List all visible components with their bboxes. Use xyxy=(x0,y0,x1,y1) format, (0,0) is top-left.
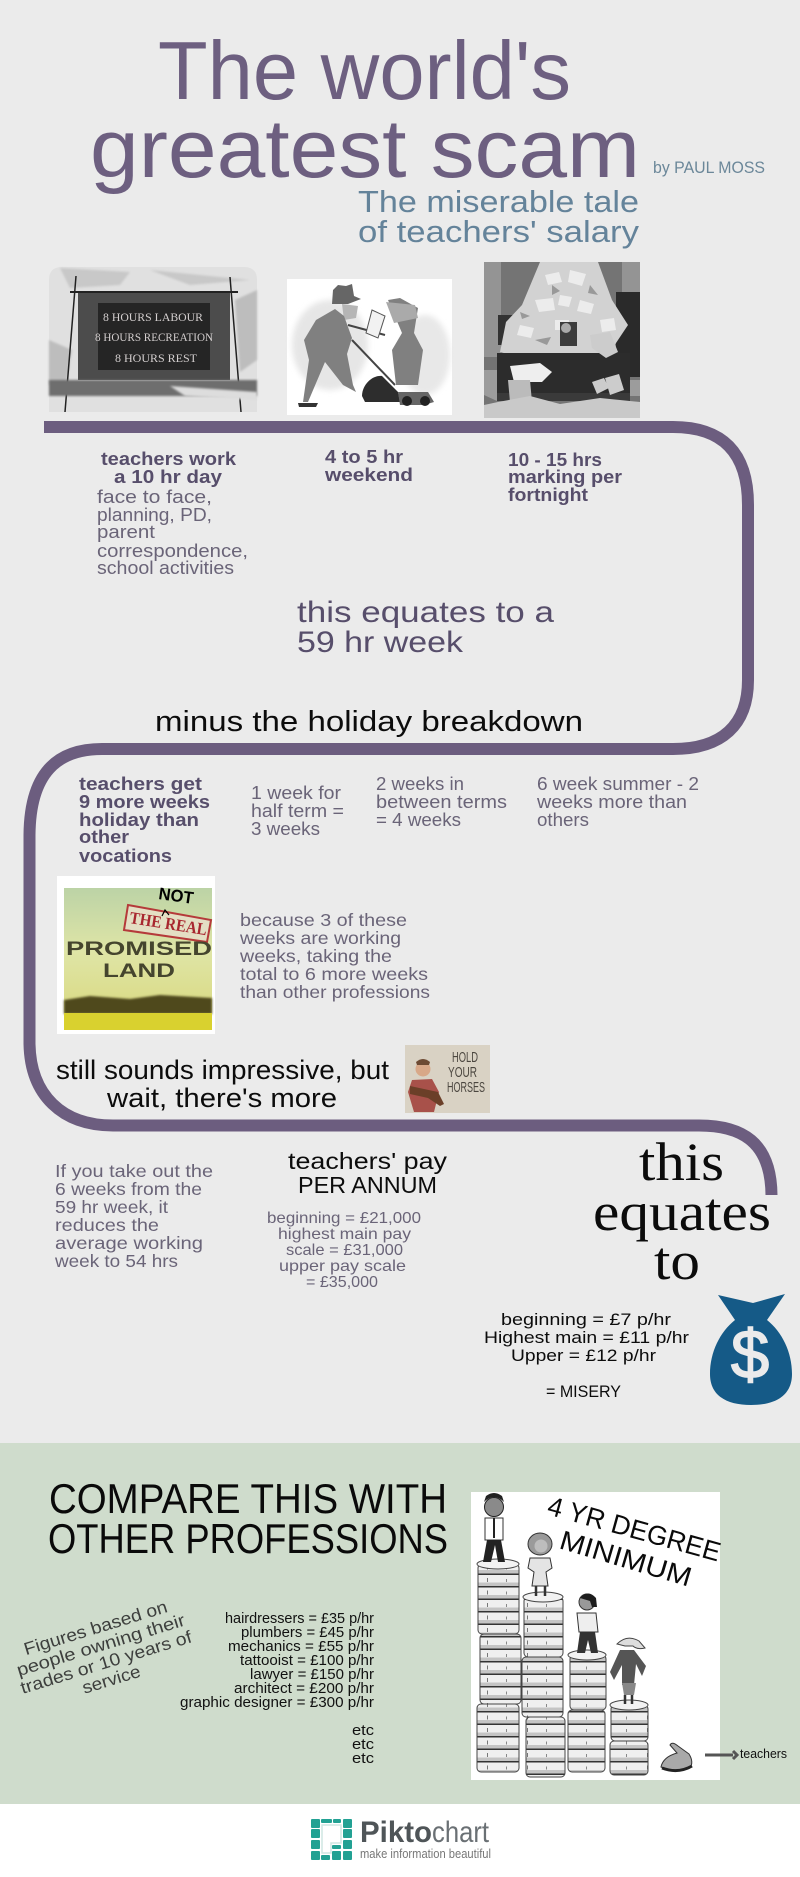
text: hourly pay: = MISERY xyxy=(546,1382,621,1401)
icon: money bag xyxy=(710,1294,792,1405)
text: summer: others xyxy=(537,810,589,830)
image: not the real promised land: PROMISED xyxy=(66,939,212,960)
list: hourly rates: mechanics = £55 p/hr xyxy=(228,1638,374,1655)
text: marking hours: 10 - 15 hrs xyxy=(508,450,602,470)
text: because 3 of these weeks xyxy=(239,910,430,1002)
text: weekend hours xyxy=(324,447,413,485)
text: hourly pay: beginning = £7 p/hr xyxy=(501,1310,671,1329)
text: weekend hours: weekend xyxy=(324,465,413,485)
text: daily duties: parent xyxy=(97,521,155,542)
text: annual pay scales: beginning = £21,000 xyxy=(267,1210,421,1227)
text: half term: 3 weeks xyxy=(251,819,320,839)
text: take out the 6 weeks: reduces the xyxy=(55,1215,159,1235)
arrow: to teachers xyxy=(705,1751,737,1759)
subtitle: of teachers' salary xyxy=(358,214,640,249)
list: hourly rates: tattooist = £100 p/hr xyxy=(240,1652,374,1669)
text: take out the 6 weeks: 6 weeks from the xyxy=(55,1179,202,1199)
text: summer xyxy=(536,774,699,830)
text: 9 more weeks holiday: 9 more weeks xyxy=(79,792,210,812)
text: annual pay scales: highest main pay xyxy=(278,1226,411,1243)
byline: by PAUL MOSS xyxy=(653,158,765,177)
heading: compare this with other professions: COMPARE THIS WITH xyxy=(49,1475,447,1522)
image: eight hours banner engraving: 8 HOURS RECREATION xyxy=(95,330,213,344)
subtitle: The miserable tale xyxy=(358,184,639,219)
image: desk buried in paper xyxy=(484,262,640,418)
text: summer: 6 week summer - 2 xyxy=(537,774,699,794)
text: take out the 6 weeks xyxy=(54,1161,213,1271)
title xyxy=(90,24,640,195)
text: half term: half term = xyxy=(251,801,344,821)
text: 9 more weeks holiday xyxy=(79,774,210,866)
text: between terms: = 4 weeks xyxy=(376,810,461,830)
heading: still sounds impressive: wait, there's more xyxy=(106,1083,337,1113)
logo: piktochart: Pikto xyxy=(360,1816,432,1849)
image: not the real promised land: NOT xyxy=(157,884,195,908)
text: half term: 1 week for xyxy=(251,783,341,803)
subtitle xyxy=(358,184,640,249)
heading: teachers' pay per annum xyxy=(288,1148,448,1198)
note: figures based on: service xyxy=(80,1661,143,1698)
text: 59 hr week: 59 hr week xyxy=(297,626,464,659)
text: marking hours: fortnight xyxy=(508,485,588,505)
text: 9 more weeks holiday: vocations xyxy=(79,846,172,866)
heading: compare this with other professions xyxy=(48,1475,448,1562)
text: summer: weeks more than xyxy=(536,792,687,812)
list: hourly rates: etc xyxy=(352,1722,375,1739)
note: figures based on: trades or 10 years of xyxy=(18,1627,194,1698)
panel: compare with other professions xyxy=(0,1443,800,1804)
logo: piktochart: chart xyxy=(432,1816,490,1849)
text: because 3 of these weeks: weeks, taking the xyxy=(239,946,392,966)
text: take out the 6 weeks: 59 hr week, it xyxy=(55,1197,168,1217)
note: figures based on xyxy=(7,1592,199,1715)
text: between terms: between terms xyxy=(376,792,507,812)
list: hourly rates: graphic designer = £300 p/hr xyxy=(180,1694,374,1711)
image: not the real promised land: THE REAL xyxy=(128,908,208,939)
image: not the real promised land: LAND xyxy=(103,961,175,982)
text: 59 hr week xyxy=(297,596,554,659)
text: weekend hours: 4 to 5 hr xyxy=(325,447,403,467)
list: hourly rates xyxy=(180,1610,375,1767)
text: marking hours: marking per xyxy=(508,467,622,487)
heading: this equates to: to xyxy=(654,1231,700,1291)
text: daily duties: correspondence, xyxy=(97,540,248,561)
heading: teachers' pay per annum: teachers' pay xyxy=(288,1148,448,1174)
heading: still sounds impressive: still sounds impressive, but xyxy=(56,1055,390,1085)
image: man mowing paper stacks xyxy=(287,279,452,415)
text: daily duties: face to face, xyxy=(97,486,212,507)
note: figures based on: people owning their xyxy=(14,1610,188,1680)
text: hourly pay: Upper = £12 p/hr xyxy=(511,1346,656,1365)
text: annual pay scales: scale = £31,000 xyxy=(286,1242,403,1259)
image: hold your horses xyxy=(405,1045,490,1113)
text: teachers work a 10 hr day: teachers work xyxy=(101,449,237,469)
text: take out the 6 weeks: week to 54 hrs xyxy=(54,1251,178,1271)
heading: teachers' pay per annum: PER ANNUM xyxy=(298,1172,437,1198)
text: hourly pay xyxy=(484,1310,689,1401)
text: marking hours xyxy=(508,450,622,505)
text: between terms: 2 weeks in xyxy=(376,774,464,794)
note: figures based on: Figures based on xyxy=(21,1596,170,1659)
text: because 3 of these weeks: total to 6 more weeks xyxy=(240,964,428,984)
text: annual pay scales: upper pay scale xyxy=(279,1258,406,1275)
image: eight hours banner engraving xyxy=(49,267,257,412)
text: teachers work a 10 hr day: a 10 hr day xyxy=(114,467,222,487)
heading: minus the holiday breakdown: minus the holiday breakdown xyxy=(155,706,583,738)
text: 9 more weeks holiday: holiday than xyxy=(79,810,199,830)
list: hourly rates: etc xyxy=(352,1736,375,1753)
title: The world's xyxy=(158,24,571,117)
heading: this equates to: this xyxy=(639,1132,724,1192)
footer band xyxy=(0,1804,800,1877)
text: annual pay scales xyxy=(267,1210,421,1291)
text: daily duties: school activities xyxy=(97,557,234,578)
list: hourly rates: architect = £200 p/hr xyxy=(234,1680,374,1697)
label: teachers: teachers xyxy=(740,1746,787,1761)
text: between terms xyxy=(376,774,507,830)
list: hourly rates: hairdressers = £35 p/hr xyxy=(225,1610,374,1627)
image: not the real promised land xyxy=(57,876,215,1034)
list: hourly rates: etc xyxy=(352,1750,375,1767)
image: hold your horses: HORSES xyxy=(447,1079,485,1096)
heading: this equates to xyxy=(593,1132,771,1291)
image: eight hours banner engraving: 8 HOURS LABOUR xyxy=(103,310,203,324)
image: coin stacks cartoon xyxy=(471,1491,724,1780)
list: hourly rates: lawyer = £150 p/hr xyxy=(250,1666,374,1683)
image: eight hours banner engraving: 8 HOURS REST xyxy=(115,351,198,365)
text: half term xyxy=(251,783,344,839)
heading: this equates to: equates xyxy=(593,1182,771,1242)
image: hold your horses: YOUR xyxy=(448,1064,477,1081)
text: 4 yr degree minimum: MINIMUM xyxy=(556,1525,695,1592)
heading: still sounds impressive xyxy=(56,1055,390,1113)
text: 4 yr degree minimum: 4 YR DEGREE xyxy=(544,1491,724,1567)
list: hourly rates: plumbers = £45 p/hr xyxy=(241,1624,374,1641)
icon: money bag: $ xyxy=(731,1316,769,1393)
timeline path xyxy=(30,427,772,1195)
heading: compare this with other professions: OTHER PROFESSIONS xyxy=(48,1515,448,1562)
title: greatest scam xyxy=(90,102,640,195)
text: daily duties xyxy=(97,486,248,578)
text: take out the 6 weeks: If you take out the xyxy=(55,1161,213,1181)
text: because 3 of these weeks: than other professions xyxy=(240,982,430,1002)
text: 9 more weeks holiday: other xyxy=(79,827,129,847)
text: because 3 of these weeks: weeks are working xyxy=(239,928,401,948)
text: because 3 of these weeks: because 3 of these xyxy=(240,910,407,930)
text: annual pay scales: = £35,000 xyxy=(306,1274,378,1291)
logo: piktochart: make information beautiful xyxy=(360,1847,491,1861)
text: 9 more weeks holiday: teachers get xyxy=(79,774,202,794)
text: teachers work a 10 hr day xyxy=(101,449,237,487)
text: daily duties: planning, PD, xyxy=(97,504,212,525)
logo: piktochart xyxy=(311,1816,491,1861)
image: hold your horses: HOLD xyxy=(452,1049,478,1066)
text: 59 hr week: this equates to a xyxy=(297,596,554,629)
text: hourly pay: Highest main = £11 p/hr xyxy=(484,1328,689,1347)
text: take out the 6 weeks: average working xyxy=(55,1233,203,1253)
